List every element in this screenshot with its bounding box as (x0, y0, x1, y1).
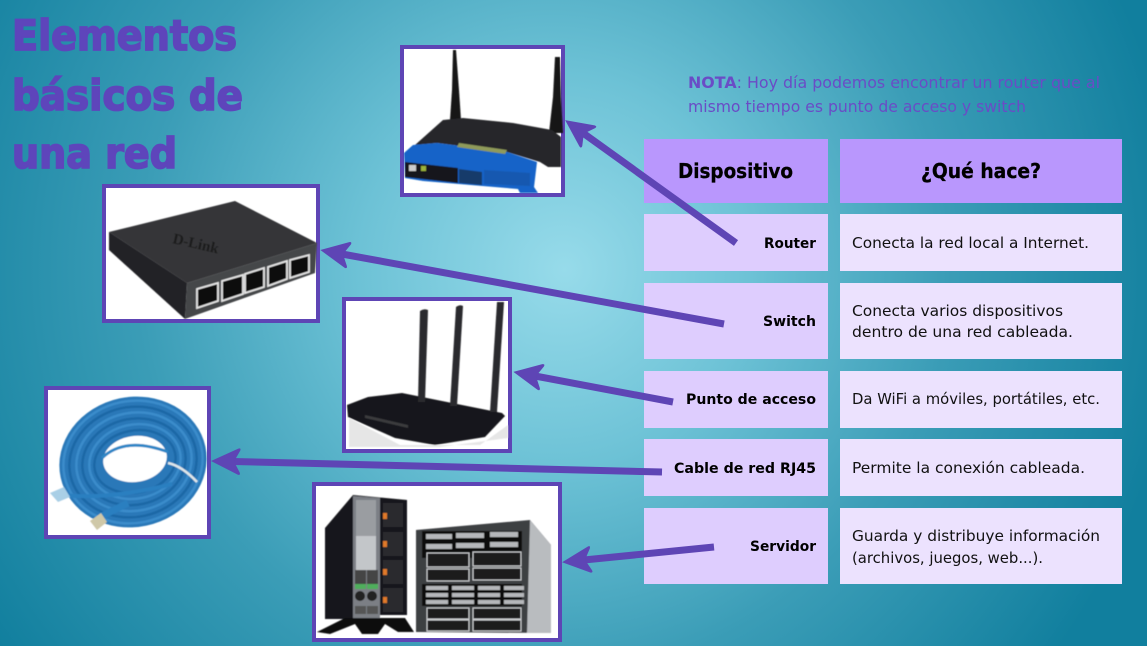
note text: NOTA: Hoy día podemos encontrar un router que al (688, 73, 1100, 92)
row: Router: Conecta la red local a Internet. (852, 234, 1089, 252)
switch ports (197, 255, 309, 308)
row: Punto de acceso: Da WiFi a móviles, portátiles, etc. (852, 390, 1100, 408)
row: Servidor: (archivos, juegos, web...). (852, 549, 1043, 567)
row: Switch: Switch (763, 314, 816, 330)
note text: mismo tiempo es punto de acceso y switch (688, 97, 1026, 116)
row: Cable de red RJ45: Permite la conexión cableada. (852, 459, 1085, 477)
title: Elementos (12, 11, 237, 60)
row: Punto de acceso: Punto de acceso (686, 392, 816, 408)
row: Cable de red RJ45 (644, 439, 1122, 496)
row: Servidor (644, 508, 1122, 584)
table header: Qué hace (840, 139, 1122, 203)
image: access point router (344, 299, 510, 451)
tower server (317, 495, 414, 634)
row: Router (644, 214, 1122, 271)
table header: Dispositivo (644, 139, 828, 203)
row: Punto de acceso (644, 371, 1122, 428)
arrow: Switch (342, 254, 724, 324)
image: D-Link switch (104, 186, 318, 321)
image: blue network cable (46, 383, 219, 541)
row: Switch (644, 283, 1122, 359)
table header: Qué hace: ¿Qué hace? (921, 159, 1041, 183)
title: básicos de (12, 71, 243, 120)
row: Switch: dentro de una red cableada. (852, 323, 1073, 341)
arrow: Punto de acceso (535, 376, 673, 402)
arrow: Router (583, 133, 736, 243)
image: D-Link switch: D-Link (171, 231, 221, 258)
arrow: Servidor (584, 547, 714, 560)
image: servers (314, 484, 560, 640)
row: Cable de red RJ45: Cable de red RJ45 (674, 461, 816, 477)
device table (644, 139, 1122, 584)
title (12, 11, 243, 178)
row: Switch: Conecta varios dispositivos (852, 302, 1063, 320)
note text (688, 73, 1100, 116)
title: una red (12, 129, 177, 178)
image: wireless router (402, 47, 563, 195)
row: Router: Router (764, 236, 817, 252)
row: Servidor: Guarda y distribuye información (852, 527, 1100, 545)
rack server (416, 520, 551, 633)
arrow: Cable de red (233, 462, 662, 472)
table header: Dispositivo: Dispositivo (678, 159, 793, 183)
row: Servidor: Servidor (750, 539, 817, 555)
